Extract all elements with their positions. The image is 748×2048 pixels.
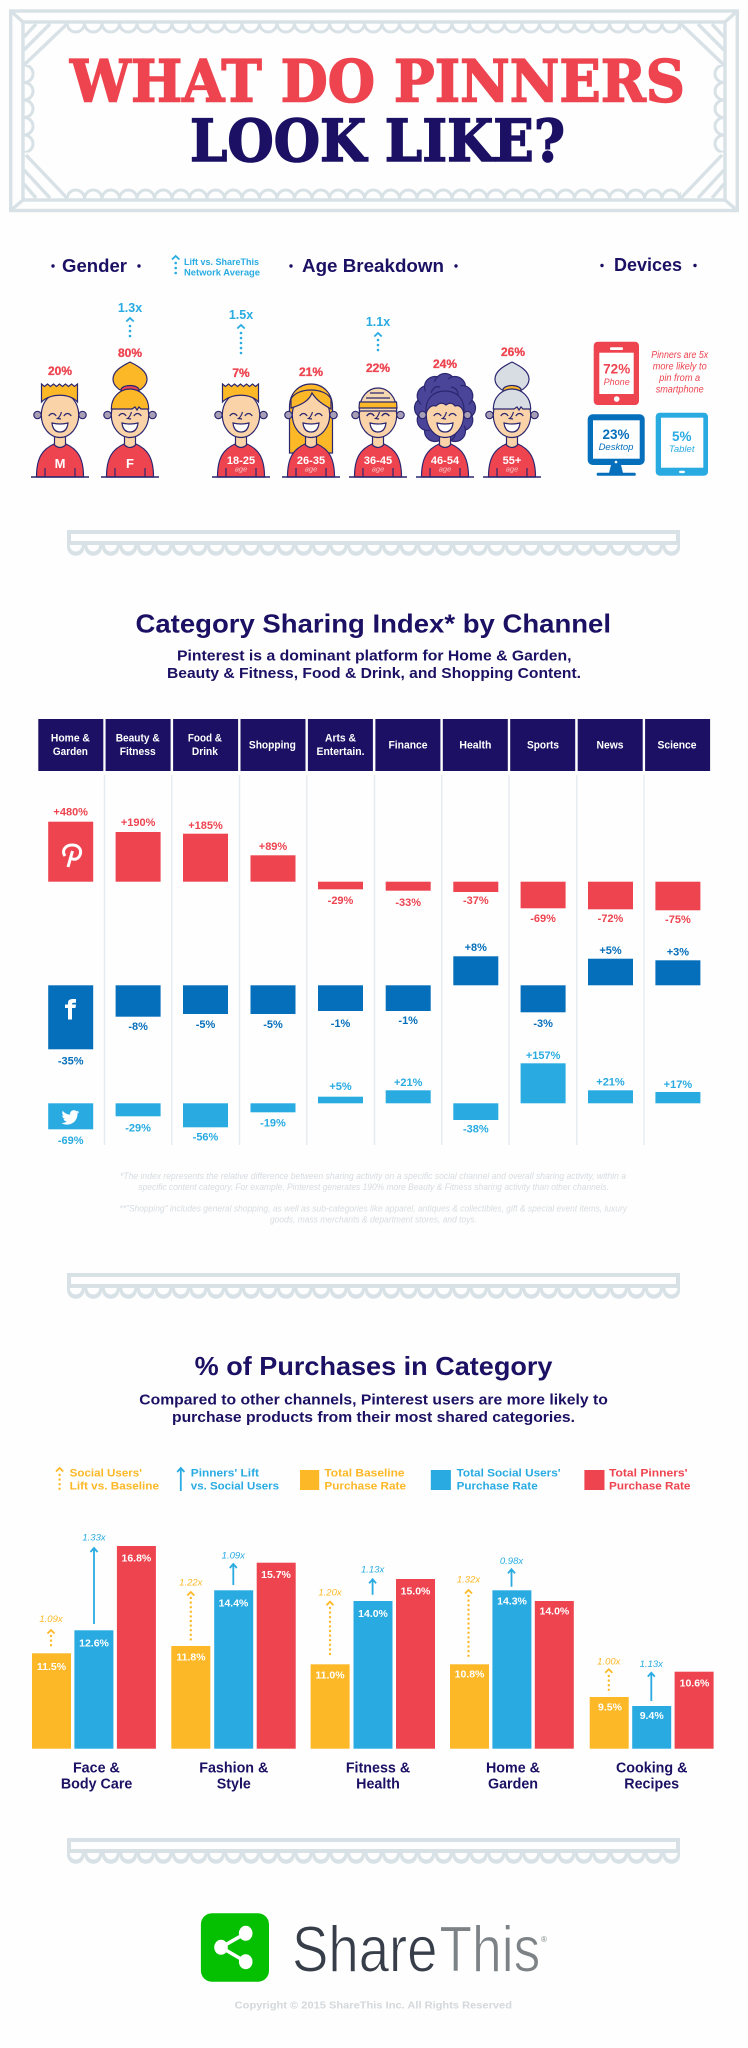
figure: age 26-35: 26-35 [297, 455, 325, 467]
icon: desktop 23% [588, 414, 645, 476]
chart: pinterest bars: +185% [188, 820, 223, 832]
chart group: home and garden: 1.32x [457, 1574, 481, 1585]
figure: age 18-25: 18-25 [227, 455, 255, 467]
chart group: cooking and recipes: 10.6% [680, 1677, 710, 1689]
logo: sharethis [201, 1913, 547, 1986]
figure: age 18-25: 7% [232, 366, 250, 380]
icon: tablet 5% [656, 413, 708, 476]
chart: pinterest bars: -33% [395, 897, 421, 909]
chart: twitter bars [48, 1050, 700, 1147]
chart group: fashion and style: Style [217, 1776, 251, 1792]
heading: Category Sharing Index* by Channel [136, 609, 611, 639]
column headers: Arts & [325, 733, 356, 745]
heading: gender: Gender [62, 256, 127, 276]
legend: lift vs network average: Lift vs. ShareThis [184, 257, 259, 268]
figure: age 36-45: 22% [366, 361, 390, 375]
chart group: home and garden: Home & [486, 1761, 540, 1777]
figure: age 36-45: age [372, 464, 384, 474]
chart: pinterest bars: -69% [530, 913, 556, 925]
chart group: cooking and recipes: Recipes [624, 1776, 679, 1792]
subheading: Pinterest is a dominant platform for Home & Garden, [177, 648, 572, 665]
copyright: Copyright © 2015 ShareThis Inc. All Rights Reserved [235, 1999, 512, 2011]
legend: lift vs network average [172, 256, 260, 278]
heading: % of Purchases in Category [195, 1351, 553, 1381]
column headers: Science [658, 740, 696, 752]
chart: twitter bars: +5% [329, 1081, 352, 1093]
legend: pinners rate [584, 1468, 690, 1492]
icon: facebook [65, 999, 76, 1020]
chart group: home and garden: 14.3% [497, 1596, 528, 1608]
column headers: Health [459, 740, 492, 752]
legend: pinners lift: vs. Social Users [191, 1480, 279, 1492]
legend: pinners lift [177, 1468, 279, 1492]
chart group: fitness and health: 15.0% [401, 1585, 431, 1597]
chart: twitter bars: -56% [193, 1132, 219, 1144]
legend: social users lift: Lift vs. Baseline [70, 1480, 159, 1492]
legend: social users rate [431, 1468, 561, 1492]
icon: share [201, 1913, 269, 1982]
figure: age 18-25: 1.5x [229, 308, 253, 322]
title panel [11, 11, 737, 210]
chart group: home and garden: 10.8% [455, 1669, 485, 1681]
icon: phone 72% [594, 342, 639, 405]
chart: twitter bars: -19% [260, 1118, 286, 1130]
figure: age 55+: 55+ [503, 455, 521, 467]
figure: age 18-25 [212, 308, 270, 477]
wordmark [292, 1913, 547, 1986]
legend: baseline rate: Purchase Rate [324, 1480, 406, 1492]
chart group: face and body care: 1.33x [82, 1533, 107, 1544]
figure: age 18-25: age [235, 464, 247, 474]
chart group: face and body care [32, 1533, 156, 1792]
chart group: fitness and health: 11.0% [315, 1670, 345, 1682]
column headers [38, 719, 710, 771]
chart group: face and body care: 12.6% [79, 1637, 110, 1649]
figure: age 55+: 26% [501, 345, 525, 359]
heading: devices: Devices [614, 255, 682, 275]
figure: female 80% with lift: 80% [118, 346, 142, 360]
figure: age 36-45 [349, 315, 407, 477]
chart group: fitness and health: 1.20x [318, 1587, 343, 1598]
wordmark: Share [292, 1913, 438, 1986]
chart: twitter bars: +17% [664, 1079, 692, 1091]
subheading [167, 648, 581, 682]
chart group: face and body care: 16.8% [122, 1553, 152, 1565]
chart: facebook bars: -5% [196, 1019, 215, 1031]
chart: facebook bars: -1% [398, 1015, 418, 1027]
column headers: Beauty & [116, 733, 160, 745]
chart: pinterest bars: +190% [121, 817, 156, 829]
chart group: fashion and style [171, 1550, 296, 1792]
panel: category sharing index [38, 609, 710, 1225]
chart group: face and body care: Body Care [61, 1776, 132, 1792]
chart: facebook bars: +8% [465, 942, 487, 954]
figure: female 80% with lift [101, 301, 159, 477]
chart group: fitness and health [311, 1565, 435, 1792]
chart: pinterest bars: -29% [328, 895, 354, 907]
divider 1 [67, 530, 680, 556]
chart: twitter bars: +21% [394, 1077, 423, 1089]
chart: pinterest bars: -37% [463, 895, 489, 907]
callout: pinners 5x: smartphone [656, 384, 704, 395]
subheading [139, 1391, 608, 1426]
callout: pinners 5x: more likely to [653, 362, 707, 373]
figure: age 46-54: age [439, 464, 451, 474]
column headers: Fitness [120, 746, 156, 758]
footnotes: specific content category. For example, Pinterest generates 190% more Beauty & Fitness sharing activity than other channels. [138, 1182, 609, 1192]
icon: tablet 5%: 5% [672, 429, 691, 444]
chart: twitter bars: -38% [463, 1123, 489, 1135]
decorative frame [11, 11, 737, 210]
chart: facebook bars: -1% [331, 1018, 350, 1030]
chart: facebook bars [48, 942, 700, 1067]
icon: pinterest [64, 845, 81, 867]
icon: phone 72%: 72% [603, 362, 630, 377]
chart group: fitness and health: Health [356, 1776, 400, 1792]
chart group: cooking and recipes: Cooking & [616, 1761, 687, 1777]
column headers: Home & [51, 733, 90, 745]
wordmark: ® [541, 1935, 547, 1944]
chart: facebook bars: +5% [599, 945, 622, 957]
column headers: Shopping [249, 740, 296, 752]
legend: lift vs network average: Network Average [184, 268, 260, 278]
chart: facebook bars: -35% [58, 1055, 84, 1067]
figure: female 80% with lift: F [126, 456, 134, 471]
figure: age 46-54: 24% [433, 357, 457, 371]
divider 2 [67, 1273, 680, 1299]
subheading: Beauty & Fitness, Food & Drink, and Shopping Content. [167, 665, 581, 682]
chart group: home and garden: Garden [488, 1776, 538, 1792]
chart: pinterest bars: -72% [598, 913, 624, 925]
panel: purchases in category [32, 1351, 714, 1792]
chart: pinterest bars [48, 807, 700, 926]
wordmark: This [439, 1913, 540, 1986]
callout: pinners 5x: Pinners are 5x [651, 350, 709, 361]
chart group: cooking and recipes: 9.5% [598, 1701, 623, 1713]
icon: desktop 23%: 23% [602, 427, 630, 442]
legend: social users lift [56, 1468, 159, 1492]
footnotes: goods, mass merchants & department stores, and toys. [270, 1215, 477, 1225]
figure: male 20%: M [55, 456, 65, 471]
footnotes [119, 1171, 627, 1225]
figure: age 55+ [483, 345, 541, 477]
chart group: cooking and recipes: 1.13x [640, 1659, 664, 1670]
legend [56, 1468, 690, 1492]
chart: facebook bars: -5% [263, 1019, 283, 1031]
chart group: cooking and recipes: 9.4% [640, 1710, 664, 1722]
legend: baseline rate: Total Baseline [324, 1468, 405, 1480]
figure: age 26-35 [282, 365, 340, 477]
chart: twitter bars: +21% [596, 1076, 625, 1088]
title line 1: WHAT DO PINNERS [69, 47, 685, 115]
column headers: Entertain. [316, 746, 364, 758]
figure: age 26-35: age [305, 464, 317, 474]
legend: pinners rate: Total Pinners' [609, 1468, 688, 1480]
figure: age 46-54 [414, 357, 476, 477]
chart group: fashion and style: 14.4% [219, 1597, 249, 1609]
figure: age 36-45: 1.1x [366, 315, 390, 329]
chart: facebook bars: +3% [667, 946, 689, 958]
footnotes: *The index represents the relative difference between sharing activity on a specific social channel and overall sharing activity, within a [120, 1171, 626, 1181]
column headers: Food & [188, 733, 222, 745]
legend: social users rate: Total Social Users' [457, 1468, 561, 1480]
chart group: fitness and health: 14.0% [358, 1608, 389, 1620]
chart group: fashion and style: Fashion & [199, 1761, 268, 1777]
chart group: fitness and health: 1.13x [361, 1565, 385, 1576]
column headers: Garden [53, 746, 88, 758]
legend: baseline rate [300, 1468, 406, 1492]
figure: female 80% with lift: 1.3x [118, 301, 142, 315]
chart group: fashion and style: 1.22x [179, 1578, 204, 1589]
chart group: cooking and recipes [590, 1656, 714, 1792]
chart: pinterest bars: +89% [259, 841, 287, 853]
callout: pinners 5x: pin from a [658, 373, 701, 384]
column headers: Drink [192, 746, 219, 758]
figure: age 55+: age [506, 464, 518, 474]
chart group: face and body care: Face & [73, 1761, 120, 1777]
chart: twitter bars: +157% [526, 1050, 561, 1062]
footnotes: **"Shopping" includes general shopping, as well as sub-categories like apparel, antiques & collectibles, gift & special event items, luxury [119, 1204, 627, 1214]
subheading: purchase products from their most shared categories. [172, 1409, 575, 1426]
legend: pinners rate: Purchase Rate [609, 1480, 690, 1492]
chart: twitter bars: -69% [58, 1135, 84, 1147]
chart: twitter bars: -29% [125, 1122, 151, 1134]
chart group: face and body care: 1.09x [39, 1614, 64, 1625]
figure: age 46-54: 46-54 [431, 455, 460, 467]
chart group: home and garden: 14.0% [540, 1606, 570, 1618]
chart group: fashion and style: 1.09x [222, 1550, 246, 1561]
chart: facebook bars: -8% [128, 1021, 148, 1033]
icon: twitter [62, 1110, 79, 1125]
chart group: fitness and health: Fitness & [346, 1761, 410, 1777]
title line 2: LOOK LIKE? [190, 107, 565, 175]
legend: social users lift: Social Users' [70, 1468, 142, 1480]
column headers: Finance [388, 740, 428, 752]
subheading: Compared to other channels, Pinterest users are more likely to [139, 1391, 608, 1408]
icon: phone 72%: Phone [604, 377, 630, 387]
figure: age 36-45: 36-45 [364, 455, 392, 467]
figure: male 20% [31, 364, 89, 477]
icon: desktop 23%: Desktop [599, 442, 633, 453]
legend: social users rate: Purchase Rate [457, 1480, 538, 1492]
chart group: fashion and style: 15.7% [261, 1569, 292, 1581]
column headers: News [596, 740, 624, 752]
chart: facebook bars: -3% [533, 1018, 553, 1030]
heading: age breakdown: Age Breakdown [302, 256, 444, 276]
chart group: fashion and style: 11.8% [176, 1652, 206, 1664]
chart group: face and body care: 11.5% [37, 1661, 67, 1673]
chart: pinterest bars: +480% [53, 807, 88, 819]
divider 3 [67, 1838, 680, 1864]
icon: tablet 5%: Tablet [669, 444, 695, 455]
legend: pinners lift: Pinners' Lift [191, 1468, 259, 1480]
chart group: cooking and recipes: 1.00x [597, 1656, 622, 1667]
panel: demographics [31, 255, 709, 477]
figure: age 26-35: 21% [299, 365, 323, 379]
figure: male 20%: 20% [48, 364, 72, 378]
chart group: home and garden: 0.98x [500, 1556, 524, 1567]
column headers: Sports [527, 740, 559, 752]
callout: pinners 5x [651, 350, 709, 395]
chart: pinterest bars: -75% [665, 914, 691, 926]
chart group: home and garden [450, 1556, 574, 1792]
